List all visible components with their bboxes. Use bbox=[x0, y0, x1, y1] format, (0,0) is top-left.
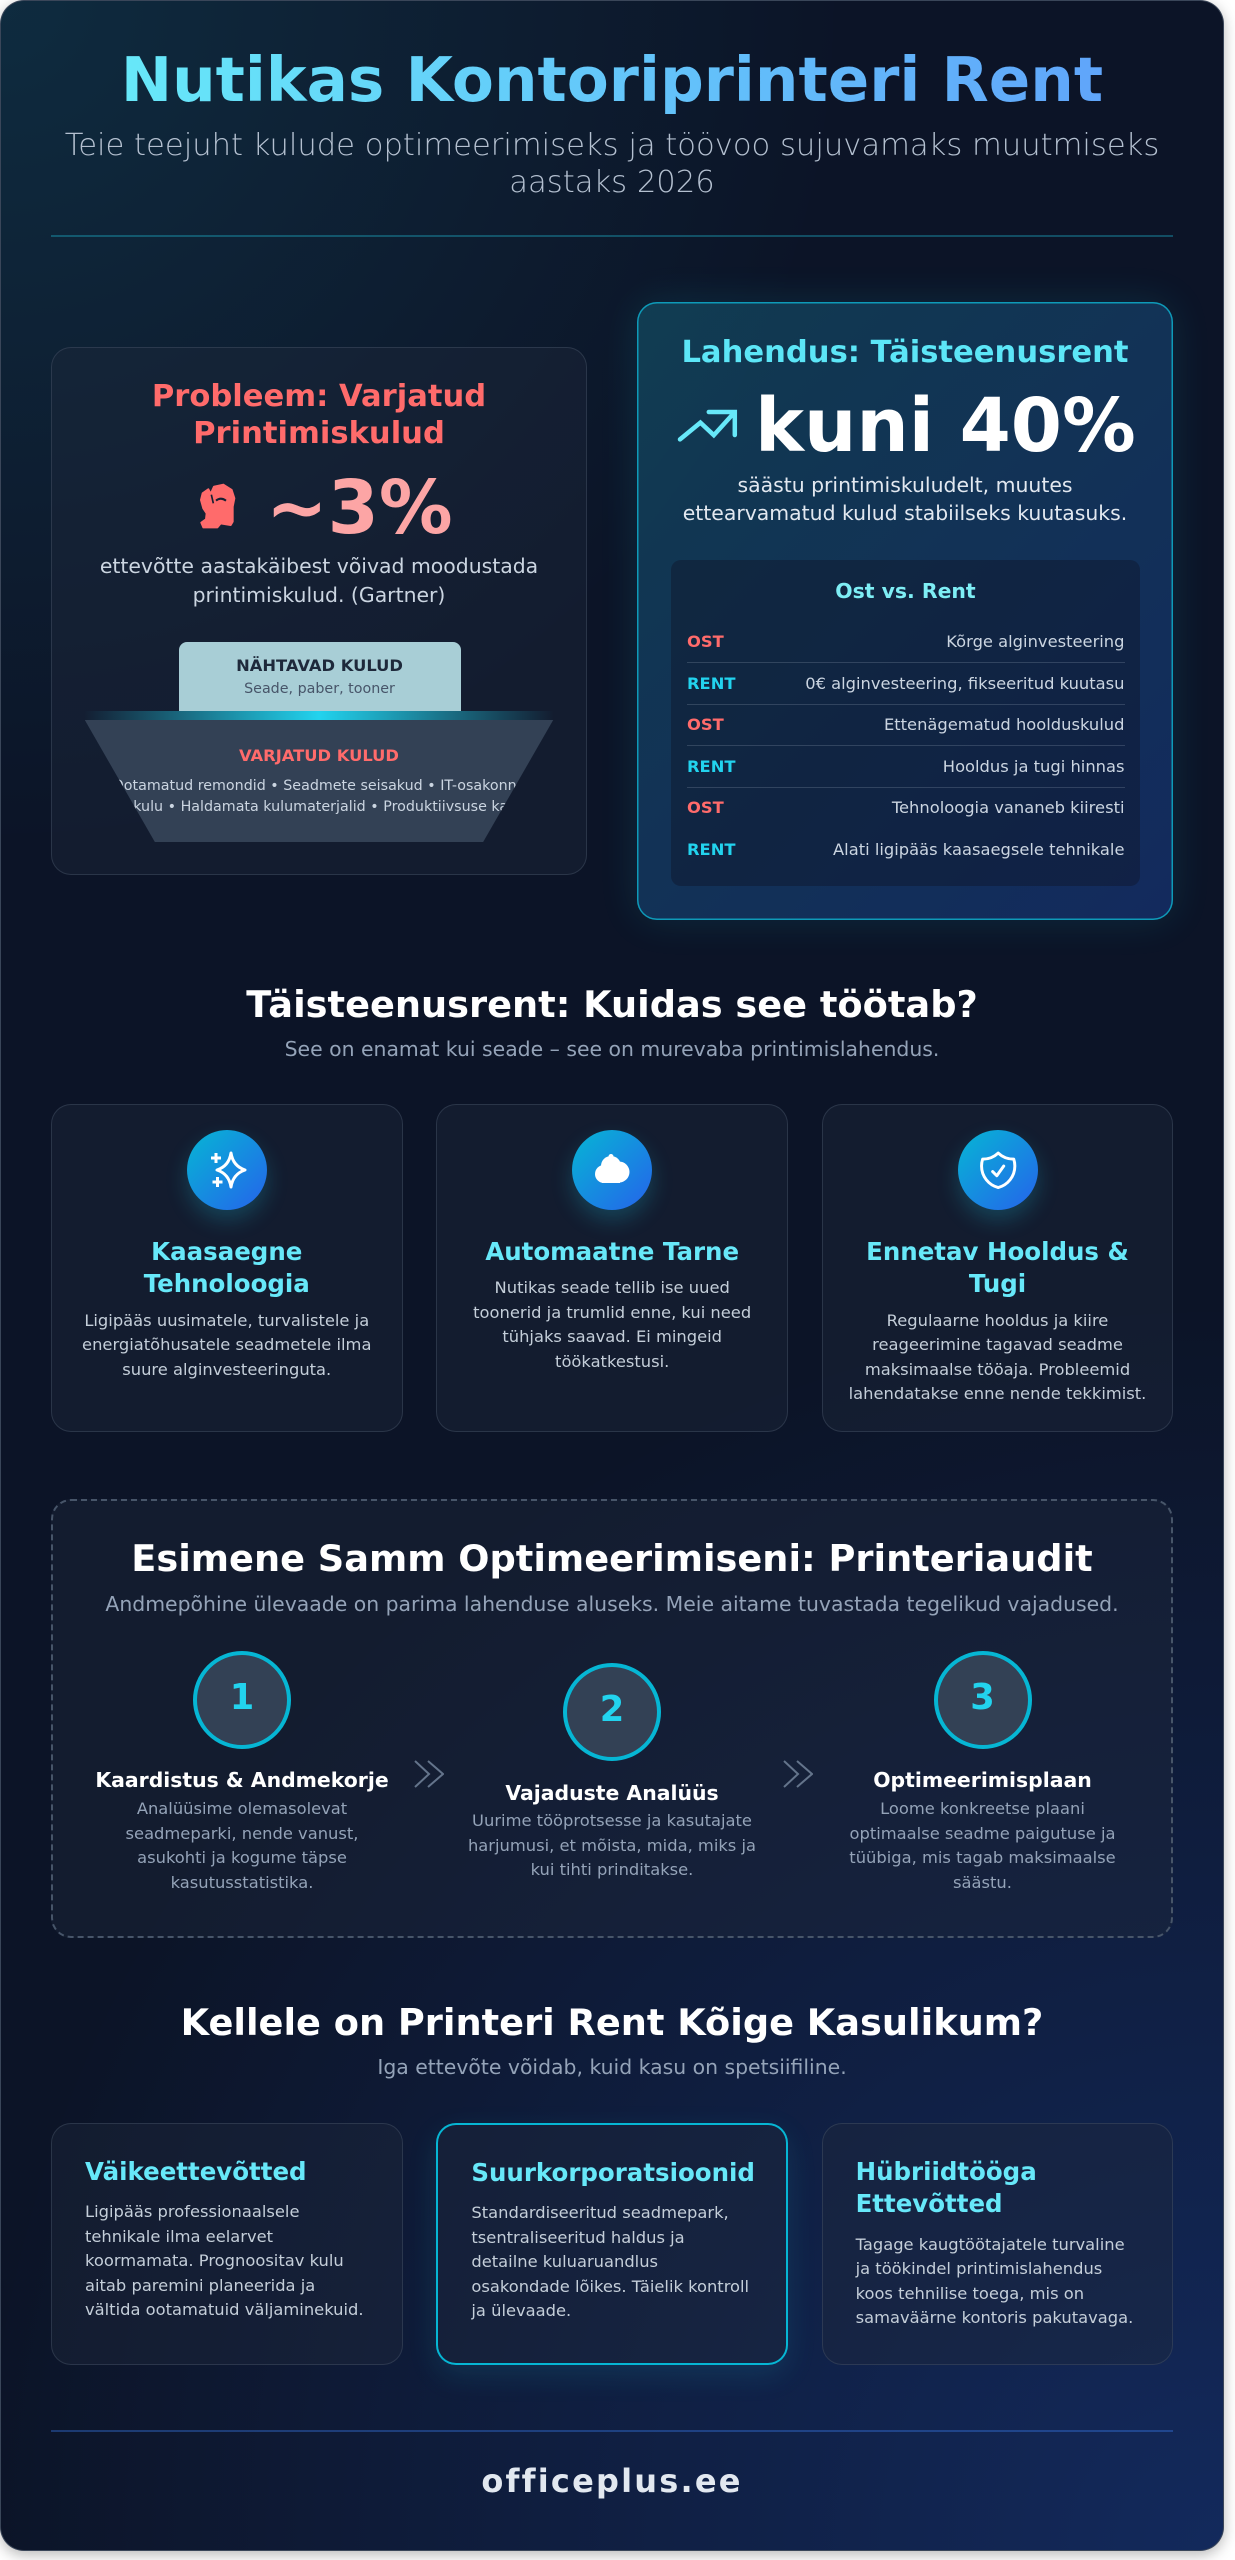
step 1 text: seadmeparki, nende vanust, bbox=[126, 1824, 358, 1843]
icon: shield bbox=[958, 1130, 1038, 1210]
step 2 text: Uurime tööprotsesse ja kasutajate bbox=[472, 1811, 752, 1830]
row 5: OST bbox=[687, 798, 724, 817]
card text: detailne kuluaruandlus bbox=[471, 2252, 658, 2271]
hidden costs label: VARJATUD KULUD bbox=[239, 746, 399, 765]
card: automatic delivery bbox=[436, 1104, 788, 1432]
card text: Standardiseeritud seadmepark, bbox=[471, 2203, 729, 2222]
footer brand: officeplus.ee bbox=[481, 2462, 743, 2500]
solution description bbox=[683, 473, 1127, 525]
card text: Ligipääs professionaalsele bbox=[85, 2202, 299, 2221]
card text: tsentraliseeritud haldus ja bbox=[471, 2228, 685, 2247]
card text bbox=[85, 2202, 364, 2319]
hidden costs list: Ootamatud remondid • Seadmete seisakud • IT-osakonna bbox=[113, 778, 525, 794]
card text: samaväärne kontoris pakutavaga. bbox=[856, 2308, 1133, 2327]
solution heading: Lahendus: Täisteenusrent bbox=[681, 335, 1129, 370]
card title: Suurkorporatsioonid bbox=[471, 2158, 755, 2186]
step 3 circle bbox=[934, 1651, 1032, 1749]
row 5 bbox=[687, 798, 1124, 817]
step 2 text: harjumusi, et mõista, mida, miks ja bbox=[468, 1836, 756, 1855]
panel: audit bbox=[51, 1499, 1173, 1938]
card text: ja ülevaade. bbox=[471, 2301, 571, 2320]
card text: energiatõhusatele seadmetele ilma bbox=[82, 1335, 371, 1354]
iceberg: hidden costs bbox=[84, 720, 554, 842]
row 6: Alati ligipääs kaasaegsele tehnikale bbox=[833, 840, 1124, 859]
stat: 3 percent: ~3% bbox=[266, 466, 453, 551]
row 4: Hooldus ja tugi hinnas bbox=[943, 757, 1124, 776]
step 2 title: Vajaduste Analüüs bbox=[505, 1780, 719, 1804]
audit heading: Esimene Samm Optimeerimiseni: Printeriaudit bbox=[131, 1537, 1093, 1580]
card title bbox=[856, 2156, 1037, 2218]
comparison table bbox=[671, 560, 1140, 886]
card title: Kaasaegne bbox=[151, 1237, 302, 1266]
row 2: 0€ alginvesteering, fikseeritud kuutasu bbox=[805, 674, 1124, 693]
step 2 circle: 2 bbox=[600, 1689, 624, 1730]
card text: tehnikale ilma eelarvet bbox=[85, 2227, 273, 2246]
card: small businesses bbox=[51, 2122, 402, 2364]
step 1 text: asukohti ja kogume täpse bbox=[137, 1848, 347, 1867]
card: large corporations bbox=[436, 2122, 788, 2364]
subtitle bbox=[65, 128, 1159, 200]
row 4 bbox=[687, 746, 1124, 788]
problem heading: Printimiskulud bbox=[193, 416, 445, 451]
row 1: Kõrge alginvesteering bbox=[946, 632, 1124, 651]
card text: osakondade lõikes. Täielik kontroll bbox=[471, 2277, 749, 2296]
row 2 bbox=[687, 663, 1124, 705]
heading: who benefits: Kellele on Printeri Rent Kõige Kasulikum? bbox=[181, 2001, 1043, 2044]
card text: ja töökindel printimislahendus bbox=[856, 2259, 1102, 2278]
panel: problem bbox=[51, 347, 587, 875]
hidden costs list: ajakulu • Haldamata kulumaterjalid • Produktiivsuse kadu bbox=[112, 798, 526, 814]
step 2 text bbox=[468, 1811, 756, 1879]
card title: Ennetav Hooldus & bbox=[866, 1237, 1129, 1266]
icon: warning blob bbox=[200, 484, 236, 528]
step 3 text bbox=[849, 1799, 1116, 1892]
card title: Tugi bbox=[969, 1269, 1026, 1298]
card title bbox=[866, 1237, 1129, 1298]
stat: up to 40 percent: kuni 40% bbox=[755, 384, 1136, 469]
step 3 circle: 3 bbox=[970, 1677, 995, 1718]
row 1 bbox=[687, 621, 1124, 663]
step 1 text bbox=[126, 1799, 358, 1892]
step 1 circle: 1 bbox=[230, 1677, 254, 1718]
problem heading: Probleem: Varjatud bbox=[152, 379, 486, 414]
problem heading bbox=[152, 379, 486, 451]
step 1 title: Kaardistus & Andmekorje bbox=[95, 1768, 389, 1792]
icon: cloud bbox=[572, 1130, 652, 1210]
card text: maksimaalse tööaja. Probleemid bbox=[865, 1360, 1130, 1379]
subtitle: Teie teejuht kulude optimeerimiseks ja töövoo sujuvamaks muutmiseks bbox=[65, 128, 1159, 163]
card title: Tehnoloogia bbox=[144, 1269, 310, 1298]
card text bbox=[849, 1311, 1146, 1403]
card: hybrid companies bbox=[822, 2122, 1173, 2364]
card title: Ettevõtted bbox=[856, 2188, 1003, 2218]
subheading: how it works: See on enamat kui seade – see on murevaba printimislahendus. bbox=[285, 1037, 939, 1061]
card text: suure alginvesteeringuta. bbox=[122, 1360, 331, 1379]
hidden costs list bbox=[119, 779, 516, 814]
row 3: Ettenägematud hoolduskulud bbox=[884, 715, 1124, 734]
card text: aitab paremini planeerida ja bbox=[85, 2276, 315, 2295]
step 1 text: Analüüsime olemasolevat bbox=[137, 1799, 347, 1818]
subtitle: aastaks 2026 bbox=[509, 164, 715, 200]
step 1 text: kasutusstatistika. bbox=[171, 1873, 313, 1892]
icon: sparkles bbox=[186, 1130, 266, 1210]
solution description: ettearvamatud kulud stabiilseks kuutasuks. bbox=[683, 501, 1127, 525]
card text: töökatkestusi. bbox=[555, 1352, 669, 1371]
card text: tühjaks saavad. Ei mingeid bbox=[502, 1327, 722, 1346]
card text bbox=[82, 1311, 371, 1379]
step 2 text: kui tihti prinditakse. bbox=[531, 1860, 693, 1879]
card text: koormamata. Prognoositav kulu bbox=[85, 2251, 344, 2270]
icon: trending up bbox=[678, 410, 738, 442]
row 3: OST bbox=[687, 715, 724, 734]
card title: Väikeettevõtted bbox=[85, 2156, 307, 2186]
solution description: säästu printimiskuludelt, muutes bbox=[737, 473, 1073, 497]
card title: Automaatne Tarne bbox=[485, 1237, 739, 1266]
row 6: RENT bbox=[687, 840, 735, 859]
row 3 bbox=[687, 705, 1124, 746]
card text bbox=[471, 2203, 749, 2320]
table heading: Ost vs. Rent bbox=[835, 579, 976, 603]
problem description bbox=[100, 554, 538, 607]
row 2: RENT bbox=[687, 674, 735, 693]
visible costs list: Seade, paber, tooner bbox=[244, 681, 395, 697]
row 1: OST bbox=[687, 632, 724, 651]
step 3 title: Optimeerimisplaan bbox=[873, 1768, 1092, 1792]
heading: how it works: Täisteenusrent: Kuidas see töötab? bbox=[246, 983, 978, 1026]
visible costs label: NÄHTAVAD KULUD bbox=[236, 656, 403, 675]
card text bbox=[473, 1278, 751, 1371]
step 2 circle bbox=[563, 1663, 661, 1761]
card text: vältida ootamatuid väljaminekuid. bbox=[85, 2300, 364, 2319]
card text: lahendatakse enne nende tekkimist. bbox=[849, 1384, 1146, 1403]
arrow: step 2 to 3 bbox=[783, 1760, 813, 1788]
arrow: step 1 to 2 bbox=[414, 1760, 444, 1788]
card text: Tagage kaugtöötajatele turvaline bbox=[856, 2235, 1125, 2254]
card text: koos tehnilise toega, mis on bbox=[856, 2284, 1084, 2303]
card text bbox=[855, 2235, 1133, 2327]
card: proactive maintenance bbox=[822, 1104, 1173, 1432]
card title bbox=[144, 1237, 310, 1298]
problem description: printimiskulud. (Gartner) bbox=[193, 583, 445, 607]
step 3 text: optimaalse seadme paigutuse ja bbox=[850, 1824, 1115, 1843]
card text: Ligipääs uusimatele, turvalistele ja bbox=[84, 1311, 369, 1330]
title: Nutikas Kontoriprinteri Rent bbox=[121, 45, 1103, 116]
card text: reageerimine tagavad seadme bbox=[872, 1335, 1123, 1354]
card: modern technology bbox=[51, 1104, 402, 1432]
row 6 bbox=[687, 840, 1124, 859]
card text: Regulaarne hooldus ja kiire bbox=[887, 1311, 1108, 1330]
iceberg: visible costs bbox=[178, 642, 460, 711]
step 3 text: Loome konkreetse plaani bbox=[880, 1799, 1085, 1818]
row 5: Tehnoloogia vananeb kiiresti bbox=[892, 798, 1124, 817]
step 3 text: säästu. bbox=[953, 1873, 1012, 1892]
step 1 circle bbox=[193, 1651, 291, 1749]
card text: Nutikas seade tellib ise uued bbox=[495, 1278, 730, 1297]
problem description: ettevõtte aastakäibest võivad moodustada bbox=[100, 554, 538, 578]
row 4: RENT bbox=[687, 757, 735, 776]
panel: solution bbox=[637, 302, 1173, 920]
subheading: who benefits: Iga ettevõte võidab, kuid kasu on spetsiifiline. bbox=[377, 2055, 847, 2079]
card title: Hübriidtööga bbox=[856, 2156, 1037, 2186]
step 3 text: tüübiga, mis tagab maksimaalse bbox=[849, 1848, 1116, 1867]
iceberg: waterline bbox=[84, 711, 554, 720]
audit subheading: Andmepõhine ülevaade on parima lahenduse aluseks. Meie aitame tuvastada tegelikud vajadused. bbox=[105, 1592, 1119, 1616]
card text: toonerid ja trumlid enne, kui need bbox=[473, 1303, 751, 1322]
